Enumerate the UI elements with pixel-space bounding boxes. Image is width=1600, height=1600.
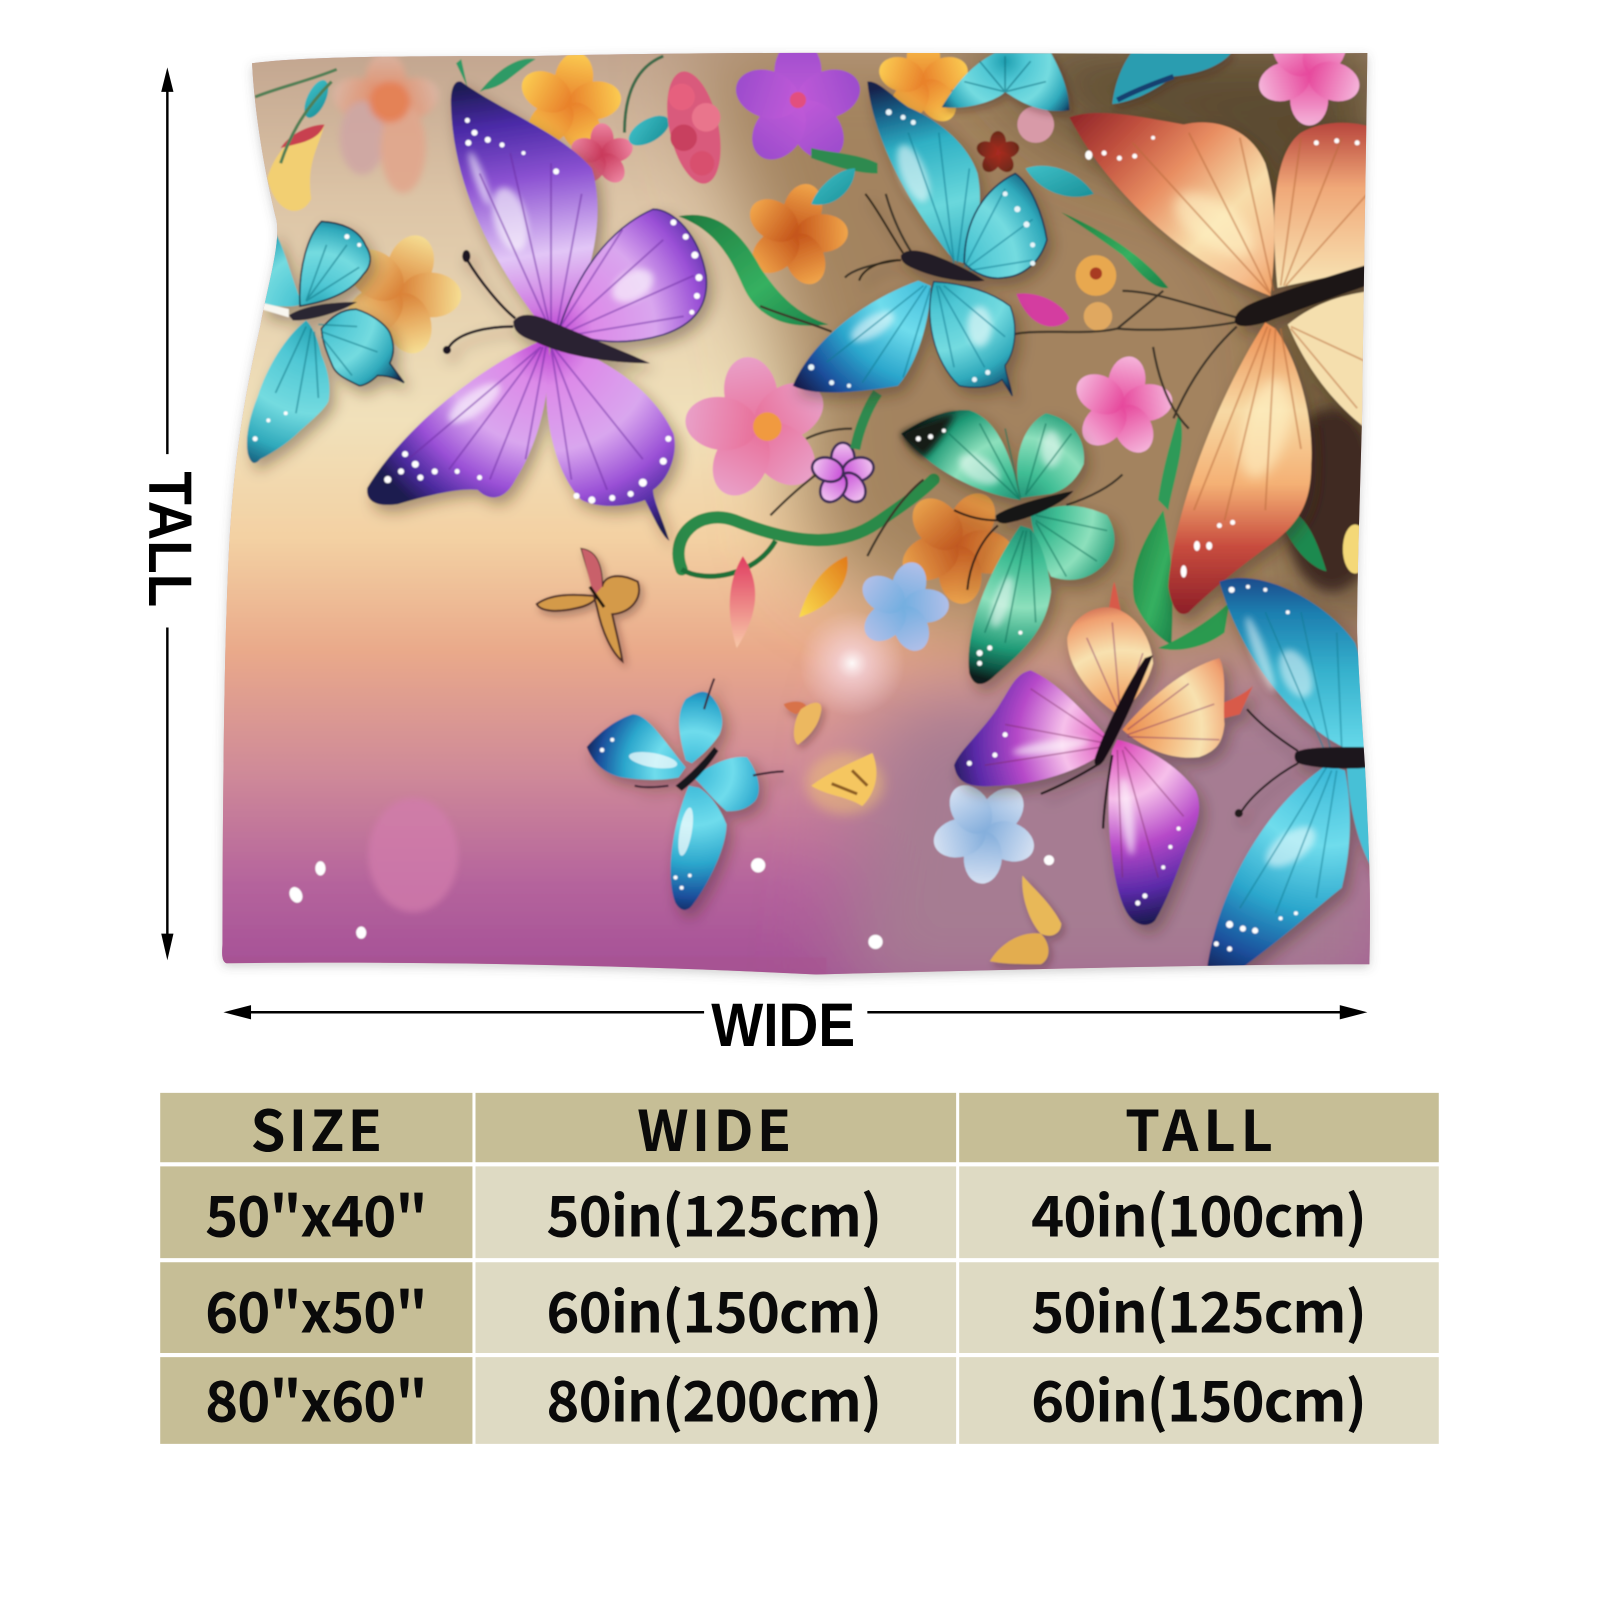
wing: upper [1219,578,1370,755]
spots [1085,136,1360,578]
spots [1214,585,1298,952]
leaf: teal top center [628,114,670,146]
antennae [449,260,515,347]
wing: upper peach [1067,607,1153,714]
butterfly: blue small [587,679,784,910]
leaf: crimson tip [281,124,324,148]
arrow: wide dimension [223,1005,1367,1019]
stem top center [624,56,663,133]
leaf: big green right [1133,510,1172,645]
leaf: green lower [1158,602,1230,650]
header cell: size [160,1093,472,1162]
stem: green near purple flower [811,148,878,173]
mauve shading lower right [837,653,1388,1000]
background gradient [204,41,1388,990]
wing: lower right [1347,767,1378,878]
wing: upper hind [964,173,1047,278]
dark shading behind big wing [1280,402,1362,598]
wing: lower left [1168,322,1312,614]
arrow line upper [166,82,169,454]
wing: upper left [1069,113,1274,296]
leaf: long green right [1061,212,1168,288]
leaf: yellow [799,556,848,617]
highlights [1241,615,1322,875]
flower: yellow daisy lower [1084,302,1112,331]
spots [384,118,703,504]
spots [808,109,1035,388]
stem: green under teal butterfly [855,393,878,449]
flower: pink large centre [753,412,782,441]
header text: tall: TALL [1125,1087,1273,1168]
swirl: green curl [682,541,776,576]
arrowhead left [223,1005,251,1019]
dark wing tip [901,413,954,457]
wing: lower [671,786,727,910]
butterfly: yellow bottom [990,876,1061,964]
wing: upper right [1017,413,1084,498]
leaf: yellow right edge [1343,524,1367,573]
wing: lower magenta [1109,740,1199,925]
veins [985,622,1219,878]
leaf: teal top left [304,79,330,119]
wide: 50in(125cm) [546,1173,882,1254]
tail red [1107,582,1253,719]
wing: left [587,714,686,780]
tall: 50in(125cm) [1031,1269,1367,1350]
soft artwork layer [204,20,1388,1000]
butterfly: glowing yellow [806,753,884,814]
wing: lower left [367,342,549,505]
butterfly: tiny orange [784,702,821,745]
flower: magenta bud [1016,293,1069,326]
leaves top [456,59,536,92]
leaf: teal right [1026,166,1094,197]
flower: pink large [669,344,846,515]
leaf: dark green [1276,509,1327,571]
stems top left [255,69,337,163]
spots [600,738,692,890]
header text: wide: WIDE [637,1087,791,1168]
veins [949,423,1107,643]
leaf: green upper stem [1158,413,1182,510]
label: WIDE: WIDE [711,991,855,1059]
cell backgrounds [160,1262,472,1353]
wing: lower right [930,282,1015,396]
row: 60x50 [160,1262,1439,1353]
size: 60"x50" [205,1269,428,1350]
cell backgrounds [160,1166,472,1258]
light cells [476,1262,1439,1353]
highlights [1164,180,1300,484]
body [676,747,718,791]
row: 50x40 [160,1166,1439,1258]
wing: upper fore [451,81,598,337]
bokeh: pink glow [804,615,900,711]
veins [1133,133,1367,520]
wide: 60in(150cm) [546,1269,882,1350]
flower: yellow-orange top [521,55,622,146]
wing: left magenta [954,670,1107,786]
wing: lower [1207,765,1350,969]
wing: upper right [1274,123,1372,288]
butterfly: peach large [1069,113,1372,614]
flower: hot pink right [1061,347,1184,466]
arrow line left [240,1011,704,1013]
flower: yellow left [348,235,462,354]
butterfly: small orange [537,549,639,661]
leaf: red-pink [730,556,755,648]
wide: 80in(200cm) [546,1357,882,1438]
highlights [628,749,696,857]
brown shading upper right [694,41,1388,673]
antennae [954,510,998,590]
butterfly: multicolor [954,582,1253,925]
flower: peach top left [333,56,438,194]
cell backgrounds [160,1357,472,1444]
arrow line right [867,1011,1352,1013]
body [1295,747,1372,769]
size: 50"x40" [205,1173,428,1254]
butterfly: purple large [367,81,707,541]
body [1094,655,1153,766]
antennae [1041,755,1112,829]
wing: lower right [546,342,675,541]
antennae [859,194,903,281]
blanket artwork [204,20,1388,1000]
bokeh: large pink oval [368,798,458,912]
row: 80x60 [160,1357,1439,1444]
butterfly: blue right [1207,578,1378,969]
highlights [954,431,1061,630]
leaf: red and yellow left [267,124,324,211]
highlights [1012,735,1138,856]
butterfly: teal left [247,221,404,463]
thin stems [760,194,1240,556]
header cell: tall [959,1093,1439,1162]
body [996,491,1073,523]
swirl: green vine [678,480,934,569]
flower: purple centre [790,92,806,108]
highlights [846,140,992,348]
spots [967,732,1181,906]
arrowhead down [161,934,173,960]
white band by edge [261,303,289,317]
foliage [678,148,1367,650]
header row [160,1087,1439,1168]
flower: orange behind green butterfly [874,465,1040,628]
size: 80"x60" [205,1357,428,1438]
dark shading top right [959,31,1388,653]
butterfly: teal top right [1112,51,1233,104]
flower: orange [749,183,849,285]
leaf: green curved centre [679,215,829,326]
size table [160,1087,1439,1444]
flower: purple [735,52,861,160]
veins [827,133,1033,383]
wing: upper left [901,410,1020,500]
veins [1240,612,1342,913]
butterfly: teal centre [793,81,1047,396]
wing: lower right [1031,506,1115,580]
body [1235,263,1372,326]
tall: 40in(100cm) [1031,1173,1367,1254]
antenna tip [1235,809,1243,817]
wing: upper [679,692,722,763]
wing: lower left [969,526,1051,684]
blanket shadow [222,53,1370,974]
tall: 60in(150cm) [1031,1357,1367,1438]
antenna tips [443,250,470,354]
flower: daisy centre [1090,267,1102,280]
antennae [1240,709,1298,814]
label: TALL: TALL [136,471,204,607]
wing: upper fore [867,81,980,263]
highlights [443,150,659,430]
flower: lilac small [809,443,877,507]
sparkles [287,855,1054,949]
body [901,251,985,281]
wing: upper hind [559,209,707,342]
leaf: teal bud [811,168,855,205]
flower: pale pink bud top [1017,106,1054,143]
light cells [476,1357,1439,1444]
pink bottom edge [214,957,827,978]
header text: size: SIZE [251,1087,382,1168]
spots [916,429,1022,666]
veins [408,153,694,490]
panel: blanket photo [204,20,1388,1000]
header cell: wide [476,1093,956,1162]
antennae [635,679,784,787]
light cells [476,1166,1439,1258]
arrowhead right [1340,1005,1367,1019]
wing: right [694,757,759,811]
arrowhead up [161,67,173,92]
arrow line lower [166,628,169,944]
flower: dark red [976,130,1020,173]
butterfly: green [901,410,1115,684]
wing: lower right [1288,291,1372,434]
flower: crimson pink [570,122,634,184]
wing: lower left [793,281,931,392]
flower: pink cluster [666,70,722,184]
butterfly: teal top [942,53,1069,111]
flower: yellow daisies [1076,255,1116,296]
flower: pink top right [1254,20,1365,126]
flowers [255,20,1365,908]
flower: orange top [878,53,969,122]
flower: pale blue bottom [908,756,1061,908]
body [513,315,650,363]
arrow: tall dimension [161,67,173,960]
wing: right peach [1122,658,1224,758]
flower: periwinkle [844,550,962,665]
